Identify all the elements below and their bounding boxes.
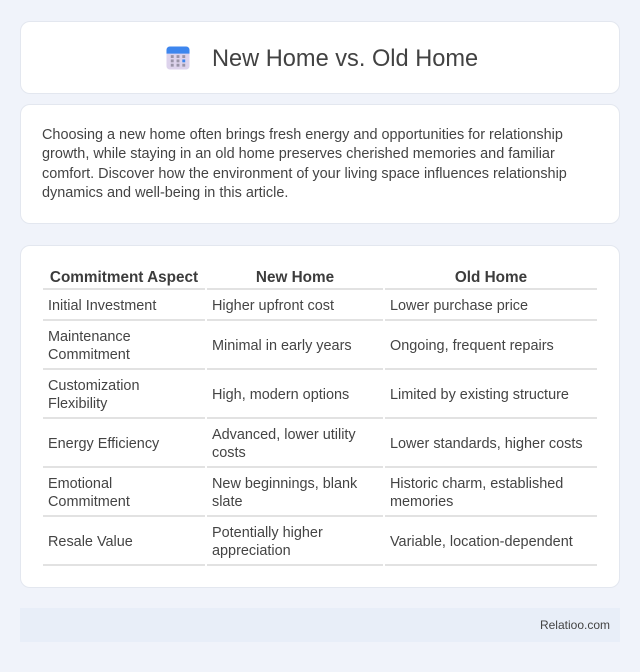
table header: Commitment Aspect <box>50 269 198 286</box>
table header <box>50 269 527 286</box>
panel: introduction <box>20 104 620 224</box>
row: initial investment: Initial Investment <box>48 298 156 314</box>
footer bar <box>20 608 620 642</box>
row: maintenance commitment: Commitment <box>48 347 130 363</box>
row: maintenance commitment: Maintenance <box>48 329 131 345</box>
row: initial investment: Higher upfront cost <box>212 298 334 314</box>
intro text <box>42 127 567 201</box>
row: maintenance commitment: Minimal in early years <box>212 338 352 354</box>
row: energy efficiency <box>48 427 583 461</box>
intro text: Choosing a new home often brings fresh energy and opportunities for relationship <box>42 127 563 143</box>
row: initial investment: Lower purchase price <box>390 298 528 314</box>
row: resale value <box>48 525 573 559</box>
row: maintenance commitment <box>48 329 554 363</box>
heading: New Home vs. Old Home <box>212 46 478 72</box>
row: emotional commitment: slate <box>212 494 242 510</box>
row: energy efficiency: costs <box>212 445 246 461</box>
row: resale value: Variable, location-dependent <box>390 534 573 550</box>
row: initial investment <box>48 298 528 314</box>
table header: New Home <box>256 269 334 286</box>
intro text: growth, while staying in an old home preserves cherished memories and familiar <box>42 146 555 162</box>
row: emotional commitment: Historic charm, established <box>390 476 563 492</box>
row: emotional commitment: New beginnings, blank <box>212 476 357 492</box>
row: resale value: appreciation <box>212 543 291 559</box>
row: energy efficiency: Lower standards, higher costs <box>390 436 583 452</box>
row: emotional commitment: memories <box>390 494 453 510</box>
row: energy efficiency: Advanced, lower utility <box>212 427 356 443</box>
panel: comparison table <box>20 245 620 588</box>
row: energy efficiency: Energy Efficiency <box>48 436 159 452</box>
row: emotional commitment <box>48 476 563 510</box>
row: customization flexibility: Customization <box>48 378 139 394</box>
intro text: comfort. Discover how the environment of your living space influences relationship <box>42 166 567 182</box>
row: customization flexibility: High, modern options <box>212 387 349 403</box>
row: resale value: Potentially higher <box>212 525 323 541</box>
icon: calendar <box>166 46 190 70</box>
row: maintenance commitment: Ongoing, frequent repairs <box>390 338 554 354</box>
row: customization flexibility <box>48 378 569 412</box>
intro text: dynamics and well-being in this article. <box>42 185 288 201</box>
footer text: Relatioo.com <box>540 618 610 632</box>
row: resale value: Resale Value <box>48 534 133 550</box>
row: customization flexibility: Flexibility <box>48 396 107 412</box>
row: emotional commitment: Emotional <box>48 476 112 492</box>
table header: Old Home <box>455 269 527 286</box>
row: emotional commitment: Commitment <box>48 494 130 510</box>
row: customization flexibility: Limited by existing structure <box>390 387 569 403</box>
panel: title <box>20 21 620 94</box>
